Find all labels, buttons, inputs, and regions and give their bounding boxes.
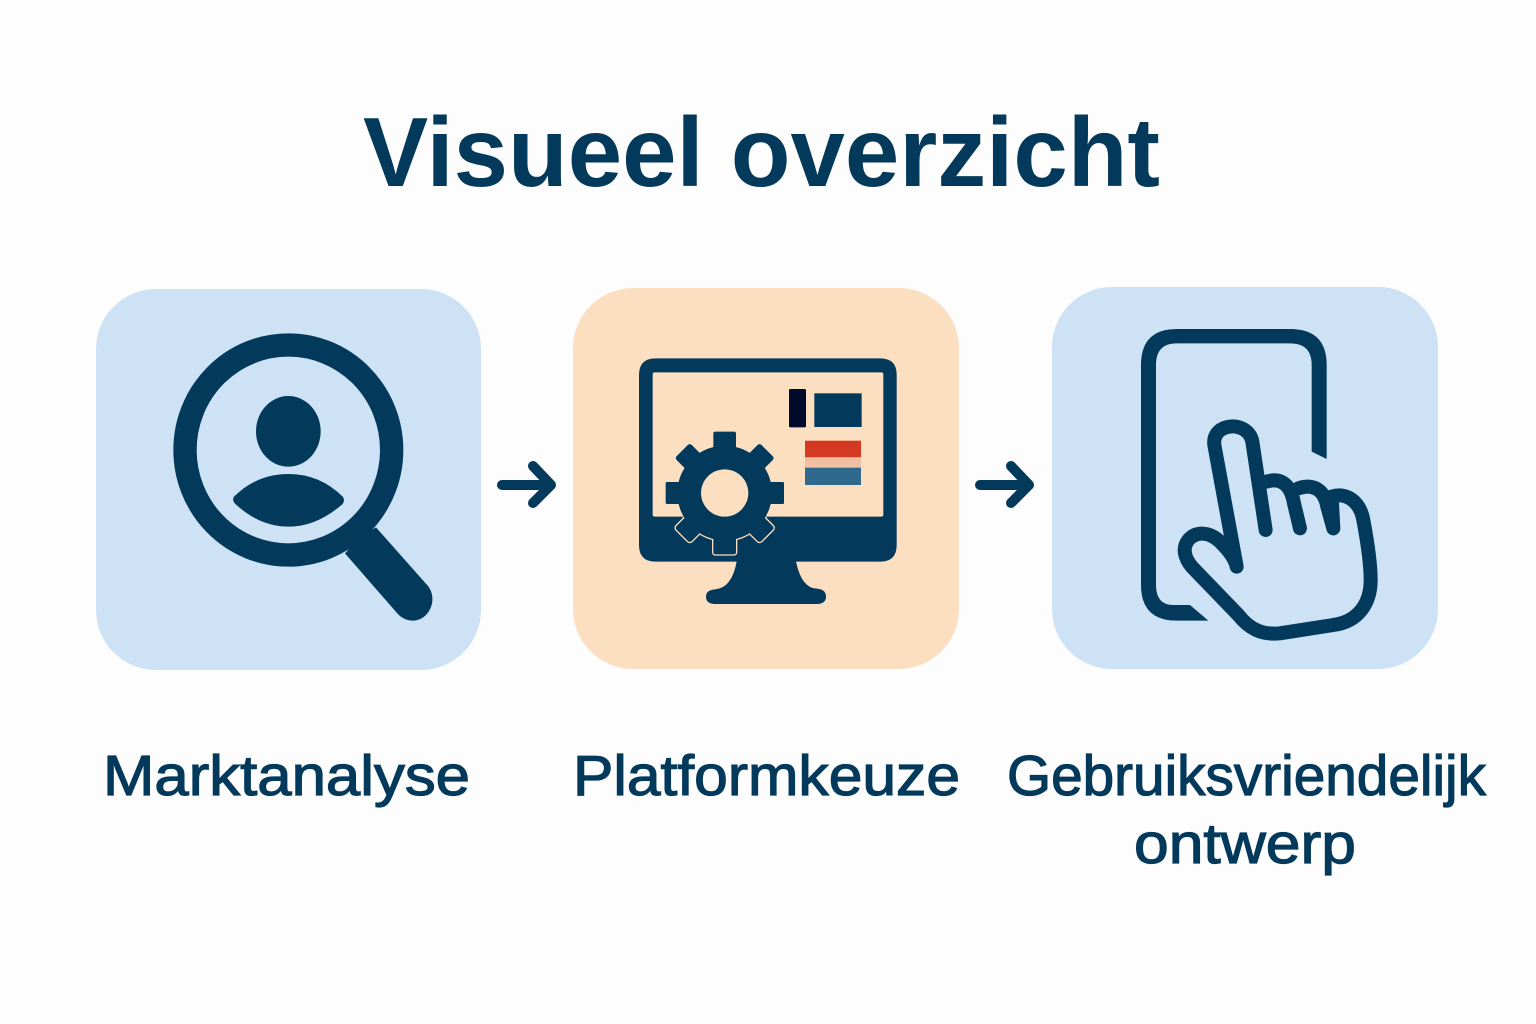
label: Gebruiksvriendelijk ontwerp: ontwerp [1134,812,1356,876]
arrow: Platformkeuze to Gebruiksvriendelijk ontwerp [980,466,1029,503]
label: Marktanalyse: Marktanalyse [103,744,470,808]
label: Platformkeuze: Platformkeuze [573,744,960,808]
arrow: Marktanalyse to Platformkeuze [502,466,551,503]
title: Visueel overzicht [363,97,1160,207]
label: Gebruiksvriendelijk ontwerp: Gebruiksvriendelijk [1007,744,1486,808]
panel: Gebruiksvriendelijk ontwerp [1052,287,1438,669]
icon: monitor with gear [639,358,897,604]
panel: Platformkeuze [573,288,959,669]
icon: magnifying glass with person [185,345,432,621]
panel: Marktanalyse [96,289,481,670]
icon: phone with pointing hand [1141,329,1371,634]
infographic [96,114,1488,876]
